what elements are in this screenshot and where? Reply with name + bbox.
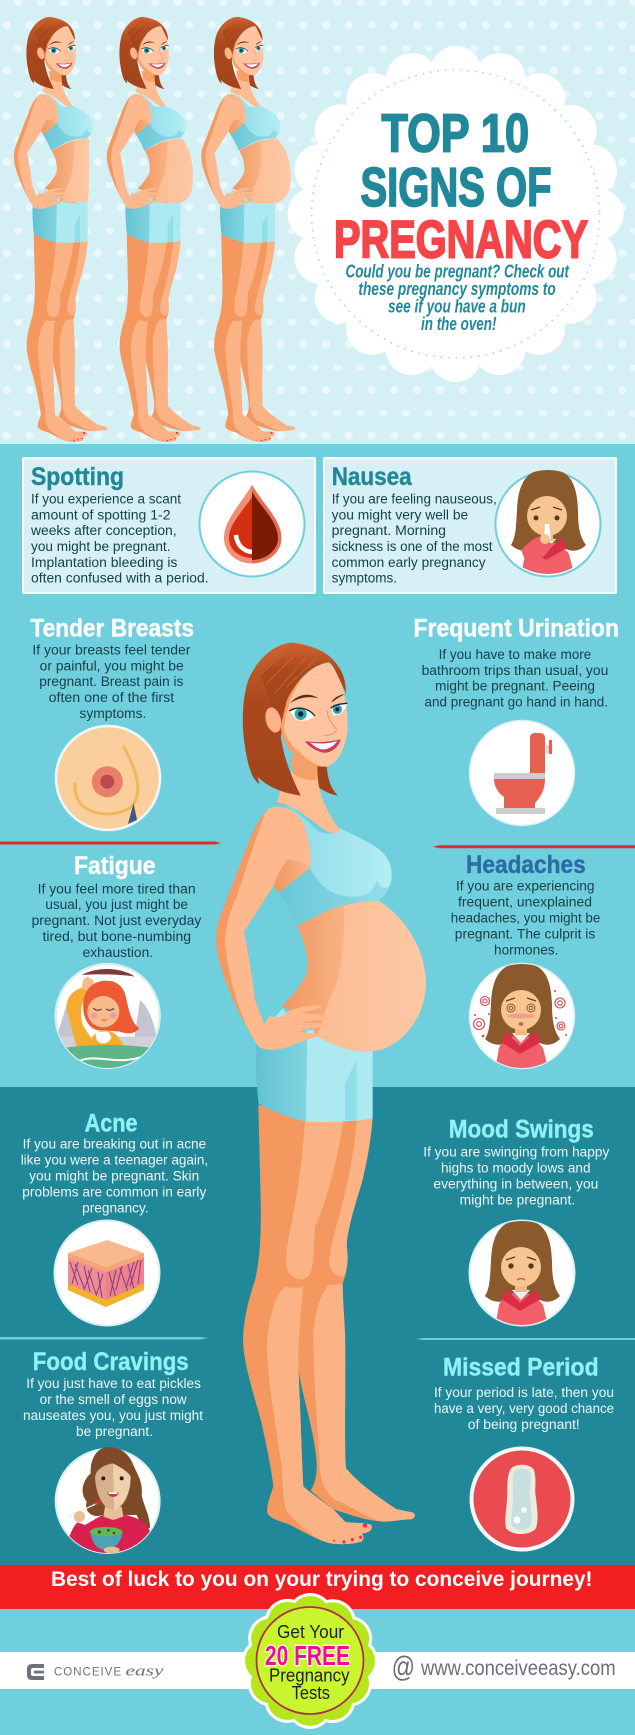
icon: breast (56, 726, 160, 830)
section: tender breasts (30, 615, 194, 830)
text: mood swings: everything in between, you (433, 1177, 598, 1192)
panel: nausea (324, 458, 616, 593)
text: missed period: If your period is late, then you (434, 1385, 614, 1400)
text: tender breasts: pregnant. Breast pain is (39, 674, 184, 689)
text: tender breasts: If your breasts feel tender (32, 642, 191, 657)
title: SIGNS OF (360, 156, 552, 218)
icon: tired woman (53, 964, 163, 1073)
text: nausea: you might very well be (332, 507, 468, 522)
text: tender breasts: symptoms. (79, 706, 146, 721)
text: mood swings (423, 1145, 610, 1208)
divider: left red (0, 842, 221, 844)
text: food cravings: or the smell of eggs now (40, 1392, 187, 1407)
light blue section background (0, 444, 635, 1087)
badge: free pregnancy tests (256, 1607, 364, 1714)
text: fatigue: If you feel more tired than (38, 881, 196, 896)
panel: spotting (23, 458, 315, 593)
text: frequent urination: might be pregnant. Peeing (435, 679, 595, 694)
heading: frequent urination: Frequent Urination (414, 615, 619, 643)
text: acne: like you were a teenager again, (21, 1153, 208, 1168)
scalloped title badge (312, 70, 600, 358)
text: nausea: If you are feeling nauseous, (332, 491, 497, 506)
footer strip (0, 1652, 635, 1689)
title: TOP 10 (382, 104, 529, 164)
heading: fatigue: Fatigue (74, 852, 156, 880)
subtitle (346, 262, 570, 334)
heading: nausea: Nausea (332, 463, 413, 491)
text: headaches: headaches, you might be (451, 910, 600, 925)
text: nausea: symptoms. (332, 571, 397, 586)
section: food cravings (23, 1348, 203, 1556)
badge text (265, 1622, 350, 1703)
text: mood swings: highs to moody lows and (441, 1161, 590, 1176)
figure: woman later stage (201, 17, 295, 442)
icon: skin layers (54, 1220, 160, 1326)
divider: right red (433, 845, 635, 848)
dark teal section background (0, 1087, 635, 1565)
heading: headaches: Headaches (466, 851, 586, 879)
text: nausea (332, 491, 497, 586)
text: headaches: pregnant. The culprit is (455, 926, 596, 941)
text: spotting: you might be pregnant. (31, 539, 170, 554)
section: acne (21, 1110, 208, 1326)
text: spotting: amount of spotting 1-2 (31, 507, 170, 522)
subtitle: see if you have a bun (388, 297, 526, 317)
text: fatigue (32, 881, 202, 960)
text: acne: If you are breaking out in acne (23, 1137, 206, 1152)
text: fatigue: usual, you just might be (45, 897, 188, 912)
text: headaches: frequent, unexplained (458, 894, 592, 909)
text: acne (21, 1137, 208, 1216)
text: missed period (434, 1385, 614, 1432)
logo: conceive easy (27, 1664, 164, 1680)
text: acne: you might be pregnant. Skin (29, 1169, 199, 1184)
divider: left teal (0, 1337, 208, 1340)
text: fatigue: tired, but bone-numbing (42, 929, 191, 944)
section: missed period (434, 1353, 614, 1550)
heading: food cravings: Food Cravings (33, 1348, 189, 1376)
badge text: Tests (292, 1683, 330, 1703)
text: food cravings: If you just have to eat pickles (26, 1376, 201, 1391)
text: acne: pregnancy. (82, 1201, 149, 1216)
heading: tender breasts: Tender Breasts (30, 615, 194, 643)
text: nausea: sickness is one of the most (332, 539, 493, 554)
text: spotting (30, 491, 209, 586)
subtitle: in the oven! (421, 314, 496, 334)
section: fatigue (32, 852, 202, 1073)
subtitle: these pregnancy symptoms to (358, 279, 556, 299)
heading: acne: Acne (85, 1110, 138, 1138)
text: frequent urination (422, 647, 608, 710)
text: tender breasts: or painful, you might be (40, 658, 184, 673)
heading: missed period: Missed Period (443, 1353, 599, 1381)
text: mood swings: might be pregnant. (460, 1193, 575, 1208)
icon: toilet (470, 720, 574, 826)
hero background (0, 0, 635, 444)
badge text: Pregnancy (269, 1666, 350, 1686)
text: frequent urination: and pregnant go hand in hand. (424, 695, 608, 710)
website (392, 1652, 616, 1684)
logo: conceive easy: CONCEIVE (54, 1667, 121, 1679)
icon: nauseous girl (496, 469, 600, 582)
text: missed period: of being pregnant! (468, 1417, 580, 1432)
text: spotting: often confused with a period. (31, 571, 209, 586)
text: headaches: hormones. (494, 942, 558, 957)
text: headaches (451, 879, 600, 957)
text: fatigue: exhaustion. (83, 945, 153, 960)
website: @ (392, 1652, 415, 1684)
text: frequent urination: If you have to make more (439, 647, 591, 662)
title (334, 104, 588, 269)
text: tender breasts (32, 642, 191, 721)
logo: conceive easy: easy (126, 1664, 164, 1680)
icon: sanitary pad (472, 1448, 572, 1550)
text: food cravings (23, 1376, 203, 1439)
text: mood swings: If you are swinging from happy (423, 1145, 610, 1160)
text: spotting: weeks after conception, (30, 523, 177, 538)
text: spotting: Implantation bleeding is (31, 555, 178, 570)
icon: headache girl (470, 963, 574, 1076)
banner (0, 1565, 635, 1609)
divider: right teal (416, 1338, 635, 1340)
icon: woman eating salad (56, 1447, 160, 1556)
text: missed period: have a very, very good chance (434, 1401, 614, 1416)
banner: Best of luck to you on your trying to conceive journey! (51, 1568, 592, 1591)
badge text: 20 FREE (265, 1640, 350, 1671)
icon: blood drop (200, 472, 304, 576)
text: spotting: If you experience a scant (31, 491, 181, 506)
section: frequent urination (414, 615, 619, 826)
section: mood swings (423, 1115, 610, 1333)
text: frequent urination: bathroom trips than usual, you (422, 663, 608, 678)
section: headaches (451, 851, 600, 1076)
footer background (0, 1609, 635, 1735)
badge text: Get Your (277, 1622, 344, 1642)
text: headaches: If you are experiencing (456, 879, 594, 894)
text: nausea: common early pregnancy (332, 555, 486, 570)
text: nausea: pregnant. Morning (332, 523, 446, 538)
heading: mood swings: Mood Swings (449, 1115, 594, 1143)
text: tender breasts: often one of the first (49, 690, 174, 705)
text: fatigue: pregnant. Not just everyday (32, 913, 202, 928)
text: food cravings: nauseates you, you just might (23, 1408, 203, 1423)
figure: woman mid stage (107, 17, 201, 442)
figure: pregnant woman (216, 643, 426, 1544)
text: food cravings: be pregnant. (76, 1424, 153, 1439)
heading: spotting: Spotting (31, 463, 124, 491)
figure: woman early stage (14, 17, 108, 442)
text: acne: problems are common in early (22, 1185, 207, 1200)
icon: sad girl (470, 1220, 574, 1333)
